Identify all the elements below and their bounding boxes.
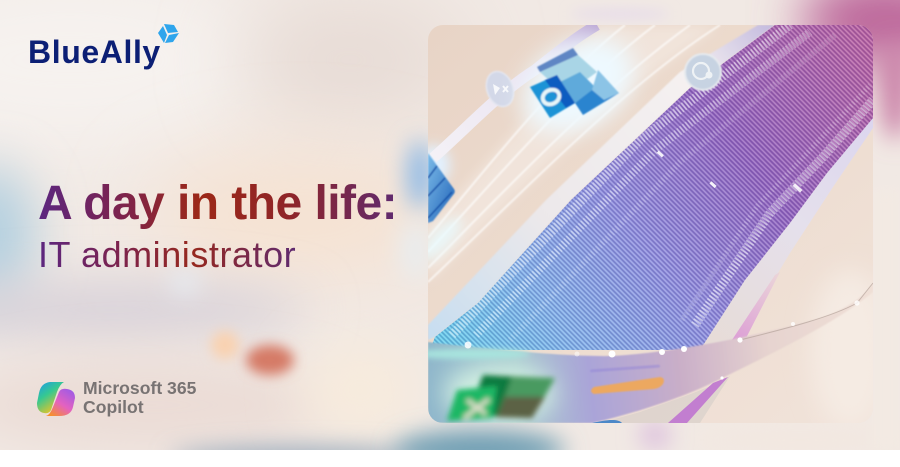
logo: BlueAlly wordmark: BlueAlly	[28, 34, 161, 70]
pink ribbon	[730, 272, 780, 343]
panel: product image	[428, 25, 873, 423]
subtitle: IT administrator	[38, 234, 296, 275]
title: A day in the life:	[38, 177, 397, 230]
white dots	[464, 300, 860, 380]
logo text: Microsoft 365 Copilot	[83, 378, 196, 417]
glass curved panel	[410, 283, 873, 423]
icon: word tile	[428, 153, 455, 223]
icon: BlueAlly cube	[158, 24, 179, 43]
icon: outlook	[512, 25, 642, 140]
icon: excel	[447, 375, 555, 421]
icon: striped purple band	[428, 25, 873, 365]
white tube	[433, 25, 597, 158]
orange pill	[591, 377, 664, 394]
icon: teams button	[485, 70, 515, 108]
logo text: Microsoft 365 Copilot: Microsoft 365	[83, 378, 196, 398]
blue glow left	[418, 145, 450, 185]
icon: Copilot logo	[37, 382, 75, 416]
white outer ribbon	[428, 25, 775, 340]
logo text: Microsoft 365 Copilot: Copilot	[83, 397, 144, 417]
icon: chat bubble button	[685, 54, 721, 90]
right ribbon	[720, 118, 873, 340]
fan of light lines	[428, 25, 720, 282]
